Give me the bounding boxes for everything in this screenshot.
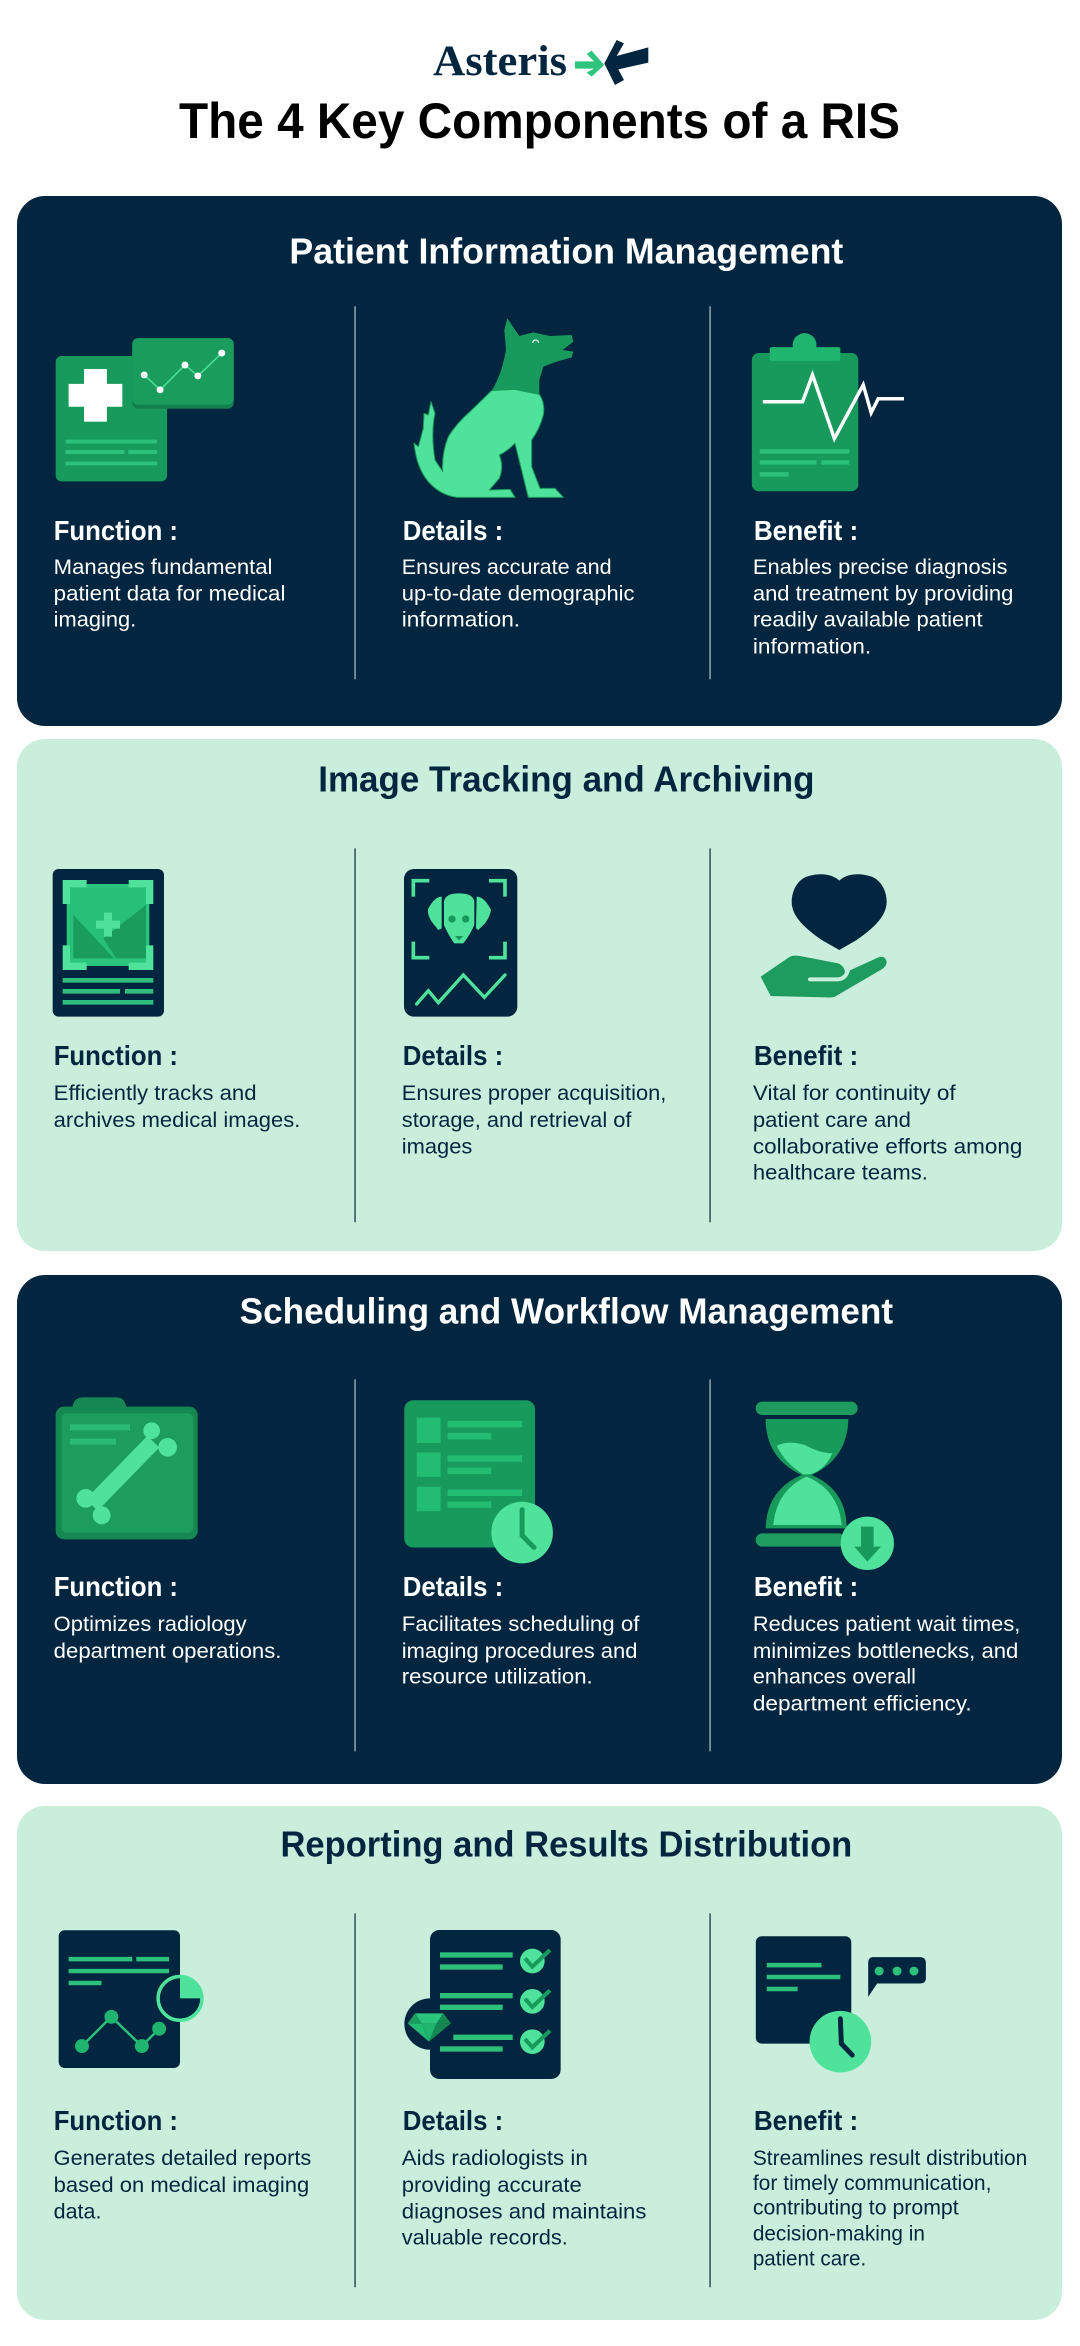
column: benefit: department efficiency. — [753, 1693, 972, 1716]
column: function: Optimizes radiology — [54, 1613, 247, 1636]
column: details: Aids radiologists in — [402, 2147, 588, 2170]
column: benefit: for timely communication, — [753, 2172, 992, 2195]
column: benefit: Streamlines result distribution — [753, 2147, 1027, 2170]
column: benefit: enhances overall — [753, 1666, 916, 1689]
icon: report with clock and chat bubble — [756, 1936, 926, 2072]
heading: Patient Information Management — [289, 232, 843, 272]
column: function: Efficiently tracks and — [54, 1082, 257, 1105]
column: benefit: Benefit : — [754, 1040, 858, 1071]
column: benefit: Benefit : — [754, 1571, 858, 1602]
column: details: imaging procedures and — [402, 1640, 637, 1663]
column: details: Details : — [403, 1571, 503, 1602]
column: details — [402, 1040, 666, 1159]
column: details: valuable records. — [402, 2227, 568, 2250]
column: details — [402, 2105, 646, 2250]
column: benefit: minimizes bottlenecks, and — [753, 1640, 1018, 1663]
column: details: information. — [402, 609, 520, 632]
column: benefit: Benefit : — [754, 515, 858, 546]
column: benefit: healthcare teams. — [753, 1162, 928, 1185]
column: benefit: readily available patient — [753, 609, 983, 632]
column: details: Details : — [403, 2105, 503, 2136]
icon: hourglass with arrow — [756, 1402, 894, 1570]
column: benefit: collaborative efforts among — [753, 1136, 1022, 1159]
column: benefit: patient care and — [753, 1109, 911, 1132]
column: benefit: contributing to prompt — [753, 2197, 959, 2220]
column: details: Ensures accurate and — [402, 556, 612, 579]
panel: Patient Information Management — [17, 196, 1062, 726]
column: details: providing accurate — [402, 2174, 582, 2197]
column: benefit: Enables precise diagnosis — [753, 556, 1007, 579]
column: details: storage, and retrieval of — [402, 1109, 632, 1132]
column: function: Function : — [54, 515, 178, 546]
column: function — [54, 1040, 300, 1132]
column: benefit — [753, 1571, 1020, 1716]
column: function: patient data for medical — [54, 583, 285, 606]
column: benefit: Vital for continuity of — [753, 1082, 956, 1105]
icon: schedule list with clock — [404, 1400, 553, 1563]
title: The 4 Key Components of a RIS — [179, 93, 900, 149]
column: details — [402, 1571, 640, 1689]
column: function — [54, 2105, 311, 2224]
column: benefit: and treatment by providing — [753, 583, 1013, 606]
panel: Reporting and Results Distribution — [17, 1806, 1062, 2320]
panel: Image Tracking and Archiving — [17, 739, 1062, 1251]
column: benefit: patient care. — [753, 2247, 866, 2270]
column: benefit: Reduces patient wait times, — [753, 1613, 1020, 1636]
icon: dog — [414, 318, 573, 497]
column: function: imaging. — [54, 609, 136, 632]
column: function: Function : — [54, 2105, 178, 2136]
column: details: Details : — [403, 515, 503, 546]
column: function: department operations. — [54, 1640, 281, 1663]
logo: Asteris — [433, 38, 648, 85]
panel: Scheduling and Workflow Management — [17, 1275, 1062, 1784]
column: benefit: decision-making in — [753, 2223, 925, 2246]
column: details: images — [402, 1136, 472, 1159]
column: function: data. — [54, 2201, 101, 2224]
heading: Image Tracking and Archiving — [318, 760, 814, 800]
column: details: Facilitates scheduling of — [402, 1613, 640, 1636]
column: details: diagnoses and maintains — [402, 2201, 646, 2224]
column: details — [402, 515, 634, 632]
column: function: based on medical imaging — [54, 2174, 309, 2197]
logo: Asteris: Asteris — [433, 38, 567, 85]
icon: heart in hand — [761, 874, 887, 998]
icon: medical record with chart — [56, 338, 234, 481]
column: details: Ensures proper acquisition, — [402, 1082, 666, 1105]
column: benefit — [753, 515, 1013, 658]
column: function: archives medical images. — [54, 1109, 300, 1132]
column: benefit — [753, 1040, 1022, 1185]
column: details: up-to-date demographic — [402, 583, 634, 606]
column: function: Function : — [54, 1571, 178, 1602]
column: function: Manages fundamental — [54, 556, 272, 579]
column: details: Details : — [403, 1040, 503, 1071]
heading: Scheduling and Workflow Management — [240, 1292, 893, 1332]
column: function: Generates detailed reports — [54, 2147, 311, 2170]
icon: dog x-ray scan — [404, 869, 517, 1017]
icon: clipboard with pulse — [752, 333, 904, 491]
icon: bone x-ray folder — [56, 1397, 198, 1539]
icon: checklist with gem — [404, 1930, 561, 2079]
column: function: Function : — [54, 1040, 178, 1071]
column: benefit: information. — [753, 635, 871, 658]
icon: x-ray film — [53, 869, 164, 1017]
column: benefit: Benefit : — [754, 2105, 858, 2136]
heading: Reporting and Results Distribution — [280, 1825, 852, 1865]
column: details: resource utilization. — [402, 1666, 593, 1689]
icon: report with chart — [59, 1930, 202, 2068]
column: function — [54, 515, 285, 632]
column: benefit — [753, 2105, 1027, 2270]
column: function — [54, 1571, 281, 1663]
